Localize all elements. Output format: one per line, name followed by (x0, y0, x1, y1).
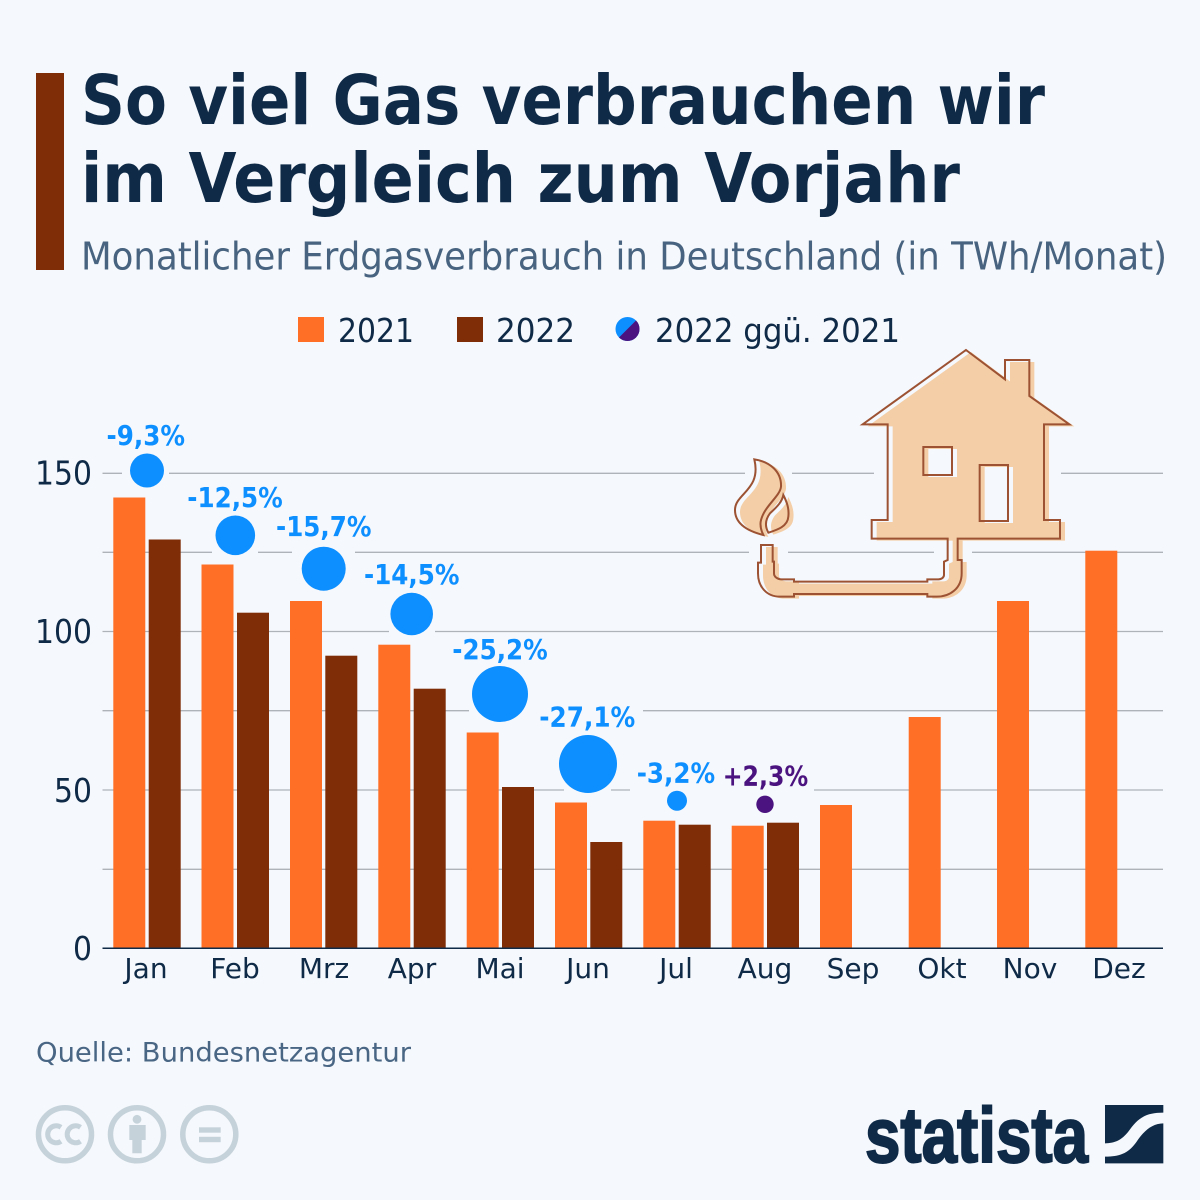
x axis labels: Okt (917, 952, 967, 985)
change labels: -3,2% (637, 758, 715, 790)
x axis labels (122, 952, 1146, 985)
change labels: -14,5% (364, 559, 460, 591)
title: im Vergleich zum Vorjahr (81, 139, 960, 219)
bars 2021 (113, 498, 1117, 948)
x axis line (102, 948, 1163, 949)
icon outline (735, 350, 1069, 597)
x axis labels: Dez (1092, 952, 1146, 985)
legend: 2022 ggü. 2021 (655, 311, 900, 350)
icon fill shape (740, 352, 1074, 599)
title: So viel Gas verbrauchen wir (81, 61, 1045, 141)
change labels: -25,2% (452, 634, 548, 666)
logo: statista: statista (865, 1091, 1088, 1179)
x axis labels: Aug (738, 952, 792, 985)
x axis labels: Apr (388, 952, 437, 985)
legend: 2021 (338, 311, 414, 350)
x axis labels: Jun (564, 952, 610, 985)
x axis labels: Mai (475, 952, 525, 985)
accent bar (36, 73, 64, 270)
x axis labels: Jul (657, 952, 693, 985)
icon: cc license (38, 1108, 236, 1161)
icon: house with gas pipe and flame (735, 350, 1074, 599)
y axis labels: 0 (73, 929, 92, 968)
title (81, 61, 1045, 219)
y axis labels: 150 (35, 454, 92, 492)
change labels: -12,5% (187, 482, 283, 514)
x axis labels: Mrz (299, 952, 349, 985)
x axis labels: Nov (1003, 952, 1057, 985)
change bubbles (130, 454, 774, 813)
x axis labels: Feb (210, 952, 260, 985)
change labels: -27,1% (539, 702, 635, 734)
bars 2022 (149, 540, 799, 948)
y axis labels (35, 454, 92, 968)
legend (298, 311, 900, 350)
change labels: -9,3% (106, 420, 185, 452)
y axis labels: 100 (35, 612, 92, 651)
x axis labels: Jan (122, 952, 168, 985)
y axis labels: 50 (54, 771, 92, 810)
change labels: -15,7% (276, 511, 372, 543)
change labels (106, 420, 808, 792)
legend: 2022 (496, 311, 575, 350)
grid lines (102, 473, 1163, 869)
source: Quelle: Bundesnetzagentur (36, 1038, 412, 1068)
x axis labels: Sep (827, 952, 879, 985)
change labels: +2,3% (723, 760, 808, 792)
